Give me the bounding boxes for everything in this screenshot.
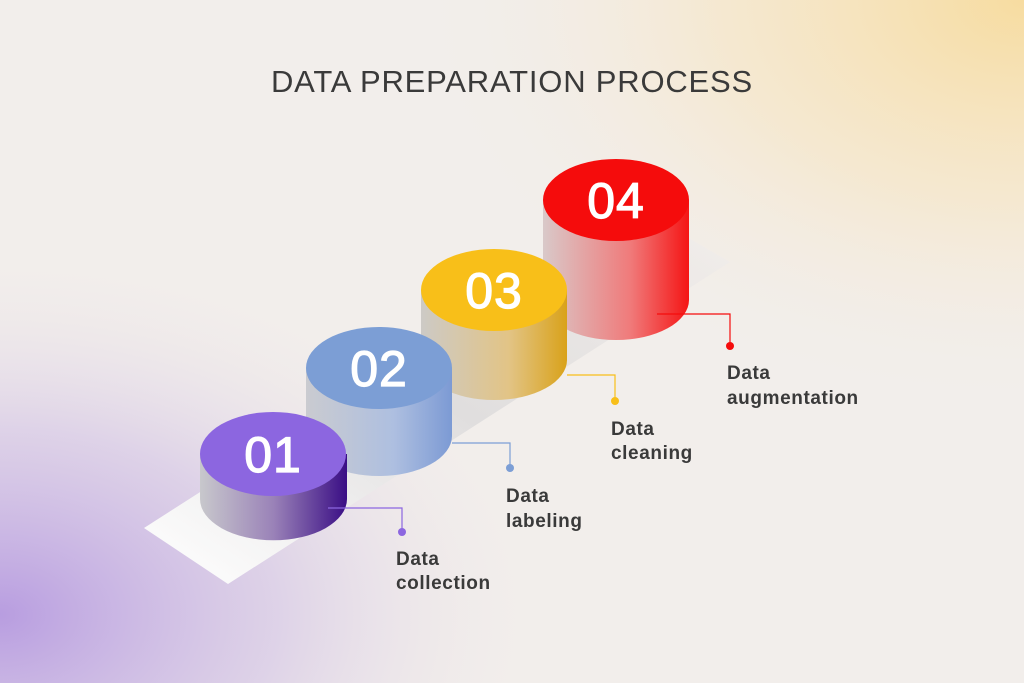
callout 03: Data — [611, 419, 655, 440]
cylinder 02 — [306, 327, 452, 476]
callout 02: Data — [506, 486, 550, 507]
cylinder 04 — [543, 159, 689, 340]
cylinder 03: 03 — [465, 263, 523, 319]
callout 04: augmentation — [727, 388, 859, 409]
callout 04 — [657, 314, 859, 409]
callout 03: cleaning — [611, 443, 693, 464]
cylinder 01: 01 — [244, 427, 302, 483]
callout 04: Data — [727, 363, 771, 384]
cylinder 04: 04 — [587, 173, 645, 229]
callout 01 — [328, 508, 491, 594]
callout 03 — [567, 375, 693, 464]
cylinder 02: 02 — [350, 341, 408, 397]
callout 01: Data — [396, 549, 440, 570]
title: DATA PREPARATION PROCESS — [271, 64, 753, 99]
cylinder 01 — [200, 412, 347, 540]
callout 02: labeling — [506, 511, 583, 532]
callout 01: collection — [396, 573, 491, 594]
cylinder 03 — [421, 249, 567, 400]
platform — [144, 210, 730, 584]
callout 02 — [452, 443, 583, 532]
